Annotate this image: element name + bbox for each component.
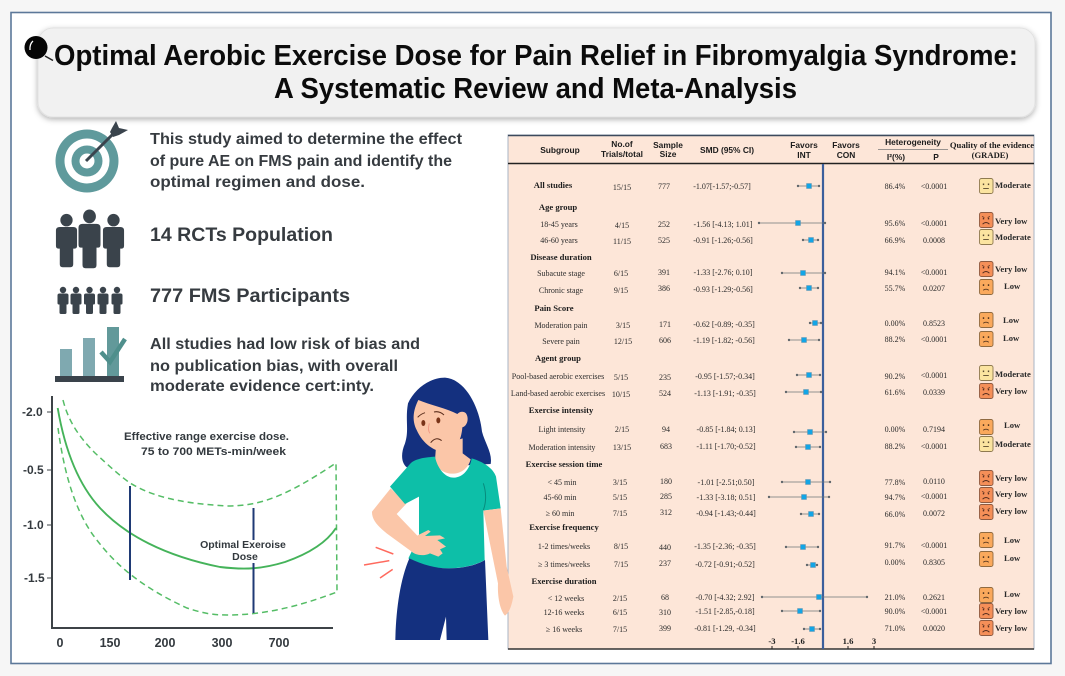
row: moderation pain: 3/15 <box>616 321 630 330</box>
forest plot axis ticks: -1.6 <box>791 636 806 646</box>
row: 46-60 years: 11/15 <box>613 237 631 246</box>
row: 16 weeks or more <box>546 620 1028 636</box>
row: all studies: 86.4% <box>885 182 906 191</box>
y axis labels <box>22 405 45 585</box>
row: 1-2 times per week: 91.7% <box>885 541 906 550</box>
row: moderation pain <box>534 312 1020 330</box>
row: light intensity: 94 <box>662 425 670 434</box>
row: pool-based <box>512 366 1031 382</box>
row: 18-45 years <box>540 212 1028 230</box>
row: 60 min or more: -0.94 [-1.43;-0.44] <box>696 509 756 518</box>
row: 3 or more times per week: -0.72 [-0.91;-0.52] <box>695 560 755 569</box>
row: 3 or more times per week <box>538 552 1021 569</box>
row: all studies: All studies <box>534 180 573 190</box>
row: pool-based: 235 <box>659 373 671 382</box>
forest plot axis ticks: 3 <box>872 636 876 646</box>
row: subacute stage <box>537 262 1028 278</box>
row: severe pain: Severe pain <box>542 337 580 346</box>
effective range annotation: Effective range exercise dose. <box>124 431 289 443</box>
row: light intensity <box>539 420 1021 434</box>
row: 12-16 weeks: -1.51 [-2.85,-0.18] <box>695 607 755 616</box>
row: under 45 min: -1.01 [-2.51;0.50] <box>698 478 755 487</box>
y axis labels: -2.0 <box>22 405 43 419</box>
row: severe pain: 88.2% <box>885 335 906 344</box>
row: severe pain: 12/15 <box>614 337 632 346</box>
heading: pain score: Pain Score <box>534 303 574 313</box>
row: 1-2 times per week: 8/15 <box>614 542 628 551</box>
row: 12-16 weeks: 310 <box>659 608 671 617</box>
row: all studies: <0.0001 <box>921 182 947 191</box>
table header: Favors <box>832 140 860 150</box>
row: 16 weeks or more: Very low <box>995 623 1028 633</box>
row: 18-45 years: <0.0001 <box>921 219 947 228</box>
icon: five people <box>58 287 122 314</box>
row: 60 min or more <box>546 504 1028 520</box>
row: 1-2 times per week: 440 <box>659 543 671 552</box>
row: 12-16 weeks <box>544 604 1028 618</box>
icon: bar chart with check <box>55 327 125 382</box>
dose-response curve <box>58 408 336 569</box>
row: 3 or more times per week: 0.00% <box>885 558 906 567</box>
row: 1-2 times per week: 1-2 times/weeks <box>538 542 590 551</box>
row: 3 or more times per week: 0.8305 <box>923 558 945 567</box>
row: 60 min or more: 7/15 <box>613 509 627 518</box>
row: under 12 weeks: < 12 weeks <box>548 594 584 603</box>
objective text: of pure AE on FMS pain and identify the <box>150 153 452 170</box>
x axis labels: 700 <box>269 636 289 650</box>
objective text <box>150 131 462 191</box>
row: subacute stage: Very low <box>995 264 1028 274</box>
row: severe pain: Low <box>1003 333 1020 343</box>
row: light intensity: -0.85 [-1.84; 0.13] <box>697 425 756 434</box>
row: 45-60 min <box>543 488 1028 502</box>
row: pool-based: -0.95 [-1.57;-0.34] <box>695 372 755 381</box>
row: 18-45 years: -1.56 [-4.13; 1.01] <box>694 220 753 229</box>
row: all studies: 777 <box>658 182 670 191</box>
row: chronic stage: Low <box>1004 281 1021 291</box>
row: subacute stage: 391 <box>658 268 670 277</box>
row: subacute stage: <0.0001 <box>921 268 947 277</box>
forest plot axis ticks <box>768 636 876 649</box>
row: pool-based: Pool-based aerobic exercises <box>512 372 604 381</box>
table header: (GRADE) <box>972 150 1009 160</box>
row: 12-16 weeks: 90.0% <box>885 607 906 616</box>
y axis labels: -0.5 <box>23 463 44 477</box>
row: under 45 min: 180 <box>660 477 672 486</box>
row: moderation pain: 0.00% <box>885 319 906 328</box>
row: 46-60 years: 525 <box>658 236 670 245</box>
row: 16 weeks or more: -0.81 [-1.29, -0.34] <box>694 624 756 633</box>
row: 16 weeks or more: 399 <box>659 624 671 633</box>
row: under 45 min: 0.0110 <box>923 477 945 486</box>
row: 60 min or more: 0.0072 <box>923 509 945 518</box>
row: all studies: -1.07[-1.57;-0.57] <box>693 182 751 191</box>
row: 60 min or more: Very low <box>995 506 1028 516</box>
row: 1-2 times per week <box>538 532 1021 552</box>
heading: exercise intensity: Exercise intensity <box>529 405 594 415</box>
icon: three people <box>56 209 124 268</box>
row: land-based: -1.13 [-1.91; -0.35] <box>694 389 756 398</box>
row: light intensity: Light intensity <box>539 425 585 434</box>
row: pool-based: <0.0001 <box>921 371 947 380</box>
effective range annotation <box>124 431 289 458</box>
row: 12-16 weeks: <0.0001 <box>921 607 947 616</box>
row: 45-60 min: 285 <box>660 492 672 501</box>
row: 18-45 years: 252 <box>658 220 670 229</box>
title text: Optimal Aerobic Exercise Dose for Pain Relief in Fibromyalgia Syndrome: <box>54 40 1018 72</box>
title text: A Systematic Review and Meta-Analysis <box>274 73 797 105</box>
row: under 12 weeks: -0.70 [-4.32; 2.92] <box>696 593 755 602</box>
objective text: This study aimed to determine the effect <box>150 131 462 148</box>
row: 1-2 times per week: Low <box>1004 535 1021 545</box>
row: under 12 weeks <box>548 588 1021 603</box>
dose-response chart <box>22 396 337 650</box>
row: moderation intensity: <0.0001 <box>921 442 947 451</box>
row: 45-60 min: -1.33 [-3.18; 0.51] <box>697 493 756 502</box>
row: chronic stage: Chronic stage <box>539 286 584 295</box>
row: moderation pain: 171 <box>659 320 671 329</box>
row: pool-based: Moderate <box>995 369 1031 379</box>
table header: Sample <box>653 140 683 150</box>
row: 3 or more times per week: 7/15 <box>614 560 628 569</box>
heading: agent group: Agent group <box>535 353 581 363</box>
table header: P <box>933 152 939 162</box>
row: 16 weeks or more: 0.0020 <box>923 624 945 633</box>
row: moderation intensity: -1.11 [-1.70;-0.52] <box>696 442 756 451</box>
row: under 45 min: 3/15 <box>613 478 627 487</box>
row: 3 or more times per week: 237 <box>659 559 671 568</box>
row: under 12 weeks: 2/15 <box>613 594 627 603</box>
y axis labels: -1.0 <box>23 518 44 532</box>
row: 46-60 years <box>540 230 1031 246</box>
upper confidence band <box>63 400 337 592</box>
forest plot axis ticks: -3 <box>768 636 776 646</box>
table header <box>540 137 1034 162</box>
row: severe pain <box>542 332 1020 346</box>
row: 18-45 years: 18-45 years <box>540 220 578 229</box>
row: chronic stage: 0.0207 <box>923 284 945 293</box>
table header: SMD (95% CI) <box>700 145 754 155</box>
x axis labels: 300 <box>212 636 232 650</box>
row: subacute stage: 94.1% <box>885 268 906 277</box>
lower confidence band <box>58 428 337 615</box>
row: light intensity: 0.00% <box>885 425 906 434</box>
row: land-based: 61.6% <box>885 388 906 397</box>
row: 45-60 min: 94.7% <box>885 493 906 502</box>
forest plot reference line <box>822 164 824 649</box>
row: severe pain: <0.0001 <box>921 335 947 344</box>
row: light intensity: 2/15 <box>615 425 629 434</box>
row: moderation pain: Low <box>1003 315 1020 325</box>
bias and certainty text: moderate evidence cert:inty. <box>150 378 374 395</box>
row: light intensity: 0.7194 <box>923 425 945 434</box>
row: 12-16 weeks: 6/15 <box>613 608 627 617</box>
participants count: 777 FMS Participants <box>150 286 350 307</box>
x axis labels: 0 <box>57 636 64 650</box>
row: subacute stage: Subacute stage <box>537 269 585 278</box>
table header: Size <box>660 149 677 159</box>
bias and certainty text: no publication bias, with overall <box>150 358 398 375</box>
row: land-based: 0.0339 <box>923 388 945 397</box>
row: 18-45 years: 95.6% <box>885 219 906 228</box>
row: chronic stage: 55.7% <box>885 284 906 293</box>
row: chronic stage: 386 <box>658 284 670 293</box>
dose markers <box>130 486 254 613</box>
row: moderation intensity <box>529 436 1031 452</box>
row: 1-2 times per week: <0.0001 <box>921 541 947 550</box>
row: under 45 min: < 45 min <box>548 478 576 487</box>
forest plot axis ticks: 1.6 <box>843 636 854 646</box>
row: subacute stage: 6/15 <box>614 269 628 278</box>
effective range annotation: 75 to 700 METs-min/week <box>141 446 287 458</box>
table header: Heterogeneity <box>885 137 941 147</box>
x axis labels: 150 <box>100 636 120 650</box>
row: 18-45 years: 4/15 <box>615 221 629 230</box>
row: severe pain: 606 <box>659 336 671 345</box>
row: land-based: Land-based aerobic exercises <box>511 389 605 398</box>
optimal dose annotation <box>200 539 286 563</box>
row: subacute stage: -1.33 [-2.76; 0.10] <box>694 268 753 277</box>
optimal dose annotation: Dose <box>232 551 258 563</box>
row: 46-60 years: 0.0008 <box>923 236 945 245</box>
row: 60 min or more: 312 <box>660 508 672 517</box>
title text <box>54 40 1018 105</box>
row: 3 or more times per week: ≥ 3 times/weeks <box>538 560 590 569</box>
title banner <box>38 28 1035 117</box>
row: under 45 min: 77.8% <box>885 478 906 487</box>
table header: Favors <box>790 140 818 150</box>
table header: No.of <box>611 139 633 149</box>
heading: exercise session time: Exercise session time <box>526 459 603 469</box>
heading: age group: Age group <box>539 202 577 212</box>
row: all studies: Moderate <box>995 180 1031 190</box>
illustration: woman in pain <box>364 378 513 640</box>
panel: forest plot table <box>508 135 1034 649</box>
row: 60 min or more: 66.0% <box>885 510 906 519</box>
row: chronic stage: 9/15 <box>614 286 628 295</box>
row: 45-60 min: Very low <box>995 489 1028 499</box>
row: 45-60 min: <0.0001 <box>921 492 947 501</box>
RCT count: 14 RCTs Population <box>150 225 333 246</box>
table header: Subgroup <box>540 145 580 155</box>
bias and certainty text: All studies had low risk of bias and <box>150 336 420 353</box>
row: chronic stage: -0.93 [-1.29;-0.56] <box>693 285 753 294</box>
bias and certainty text <box>150 336 420 395</box>
row: land-based: 524 <box>659 389 671 398</box>
table header: I²(%) <box>887 152 905 162</box>
row: moderation pain: Moderation pain <box>534 321 588 330</box>
row: 46-60 years: 46-60 years <box>540 236 578 245</box>
chart axes <box>52 396 333 628</box>
heading: exercise duration: Exercise duration <box>531 576 597 586</box>
row: moderation intensity: 683 <box>660 442 672 451</box>
row: 45-60 min: 5/15 <box>613 493 627 502</box>
row: 16 weeks or more: 71.0% <box>885 624 906 633</box>
optimal dose annotation: Optimal Exeroise <box>200 539 286 551</box>
table header: INT <box>797 150 812 160</box>
x axis labels <box>57 636 289 650</box>
icon: target with arrow <box>56 121 128 192</box>
row: under 45 min: Very low <box>995 473 1028 483</box>
row: under 12 weeks: 68 <box>661 593 669 602</box>
row: all studies: 15/15 <box>613 183 631 192</box>
heading: disease duration: Disease duration <box>530 252 592 262</box>
row: 60 min or more: ≥ 60 min <box>546 509 574 518</box>
row: moderation intensity: Moderation intensity <box>529 443 595 452</box>
row: 1-2 times per week: -1.35 [-2.36; -0.35] <box>694 542 756 551</box>
row: under 12 weeks: Low <box>1004 589 1021 599</box>
row: land-based <box>511 384 1028 399</box>
row: 46-60 years: Moderate <box>995 232 1031 242</box>
row: moderation intensity: 13/15 <box>613 443 631 452</box>
row: under 12 weeks: 21.0% <box>885 593 906 602</box>
row: 16 weeks or more: ≥ 16 weeks <box>546 625 582 634</box>
row: 46-60 years: -0.91 [-1.26;-0.56] <box>693 236 753 245</box>
row: light intensity: Low <box>1004 420 1021 430</box>
row: under 12 weeks: 0.2621 <box>923 593 945 602</box>
x axis labels: 200 <box>155 636 175 650</box>
row: land-based: 10/15 <box>612 390 630 399</box>
row: 12-16 weeks: 12-16 weeks <box>544 608 584 617</box>
row: all studies <box>534 178 1031 194</box>
row: 18-45 years: Very low <box>995 216 1028 226</box>
row: 16 weeks or more: 7/15 <box>613 625 627 634</box>
row: moderation intensity: Moderate <box>995 439 1031 449</box>
row: 46-60 years: 66.9% <box>885 236 906 245</box>
row: chronic stage <box>539 280 1021 295</box>
row: moderation intensity: 88.2% <box>885 442 906 451</box>
row: moderation pain: -0.62 [-0.89; -0.35] <box>693 320 755 329</box>
row: land-based: Very low <box>995 386 1028 396</box>
row: 3 or more times per week: Low <box>1004 553 1021 563</box>
row: pool-based: 90.2% <box>885 372 906 381</box>
icon: magnifier <box>24 36 53 60</box>
row: 12-16 weeks: Very low <box>995 606 1028 616</box>
table header: Quality of the evidence <box>950 140 1034 150</box>
table header: Trials/total <box>601 149 643 159</box>
heading: exercise frequency: Exercise frequency <box>529 522 600 532</box>
row: under 45 min <box>548 470 1028 487</box>
row: moderation pain: 0.8523 <box>923 319 945 328</box>
table header: CON <box>837 150 855 160</box>
y axis labels: -1.5 <box>24 571 45 585</box>
row: 45-60 min: 45-60 min <box>543 493 577 502</box>
row: pool-based: 5/15 <box>614 373 628 382</box>
objective text: optimal regimen and dose. <box>150 174 365 191</box>
row: severe pain: -1.19 [-1.82; -0.56] <box>693 336 755 345</box>
